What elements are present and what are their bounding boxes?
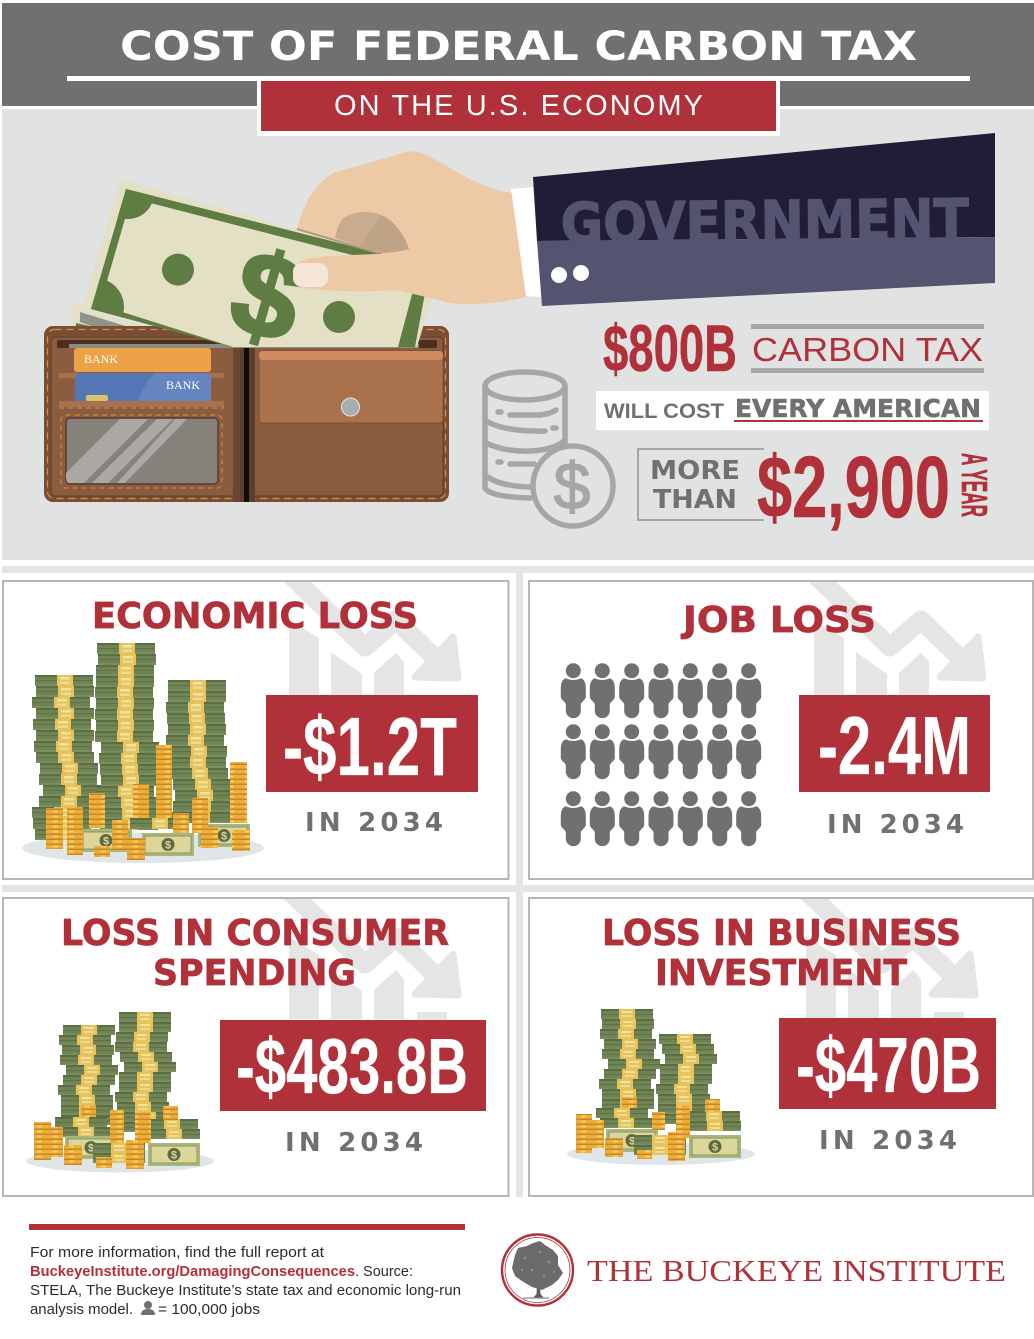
front bill — [82, 179, 432, 347]
government sleeve — [533, 133, 995, 306]
hand front and thumb — [293, 193, 527, 304]
money slot overlay — [69, 344, 419, 348]
strip: will cost every American: EVERY AMERICAN — [735, 394, 981, 423]
stat: more than $2,900 a year: $2,900 — [757, 439, 950, 536]
heading: SPENDING — [153, 953, 356, 994]
logo: The Buckeye Institute — [502, 1234, 1006, 1306]
grid separators — [2, 566, 1034, 1197]
panel: loss in consumer spending — [3, 887, 508, 1196]
footer source note: . Source: — [355, 1263, 413, 1280]
panel: economic loss — [3, 570, 508, 879]
footer source note: analysis model. — [30, 1301, 133, 1318]
stat: more than $2,900 a year: MORE — [650, 456, 740, 486]
card: blue — [75, 373, 211, 401]
heading: LOSS IN CONSUMER — [61, 913, 449, 954]
money pile — [567, 1009, 755, 1165]
card: orange: BANK — [84, 352, 118, 366]
stat: $800B carbon tax — [603, 311, 984, 385]
title: COST OF FEDERAL CARBON TAX — [120, 24, 917, 70]
stat: $800B carbon tax: CARBON TAX — [752, 331, 983, 368]
icon: person legend — [141, 1301, 155, 1315]
back bill — [69, 303, 220, 347]
footer source note — [29, 1224, 465, 1318]
stat: more than $2,900 a year: A YEAR — [954, 453, 995, 517]
heading — [61, 913, 449, 994]
icon: coin database: $ — [554, 449, 590, 523]
subtitle: ON THE U.S. ECONOMY — [334, 90, 703, 122]
people grid — [561, 663, 761, 846]
logo wordmark: THE BUCKEYE INSTITUTE — [587, 1253, 1006, 1288]
illustration: wallet, money and hand — [44, 133, 995, 502]
header band — [2, 3, 1034, 136]
footer source note: BuckeyeInstitute.org/DamagingConsequences — [30, 1263, 355, 1280]
year label: IN 2034 — [305, 808, 443, 838]
hero background — [2, 109, 1034, 560]
card: blue: BANK — [166, 378, 200, 392]
card: orange — [74, 348, 211, 372]
strip: will cost every American — [596, 391, 989, 430]
government label: GOVERNMENT — [560, 188, 969, 257]
hand back — [297, 151, 527, 298]
year label: IN 2034 — [819, 1126, 957, 1156]
panel: job loss — [529, 570, 1033, 879]
money pile — [26, 1012, 214, 1172]
value box: -2.4M — [818, 699, 971, 792]
footer source note: = 100,000 jobs — [158, 1301, 260, 1318]
wallet — [44, 326, 449, 502]
stat: more than $2,900 a year: THAN — [653, 485, 737, 515]
heading: ECONOMIC LOSS — [92, 596, 418, 637]
year label: IN 2034 — [285, 1128, 423, 1158]
heading — [602, 913, 961, 994]
footer source note: For more information, find the full report at — [30, 1244, 325, 1261]
icon: coin database — [485, 372, 613, 526]
stat: more than $2,900 a year — [638, 439, 995, 536]
footer source note: STELA, The Buckeye Institute’s state tax and economic long-run — [30, 1282, 461, 1299]
value box: -$483.8B — [236, 1022, 468, 1110]
heading: JOB LOSS — [680, 600, 876, 641]
card window — [66, 418, 218, 484]
right pocket — [259, 351, 443, 495]
logo seal — [502, 1234, 573, 1306]
cuff — [511, 187, 542, 297]
front bill: $ — [217, 224, 317, 369]
panel: loss in business investment — [529, 887, 1033, 1196]
heading: LOSS IN BUSINESS — [602, 913, 961, 954]
year label: IN 2034 — [827, 810, 964, 840]
money pile — [22, 643, 264, 863]
heading: INVESTMENT — [655, 953, 907, 994]
stat: $800B carbon tax: $800B — [603, 311, 737, 385]
strip: will cost every American: WILL COST — [604, 400, 724, 423]
value box: -$1.2T — [283, 700, 457, 793]
